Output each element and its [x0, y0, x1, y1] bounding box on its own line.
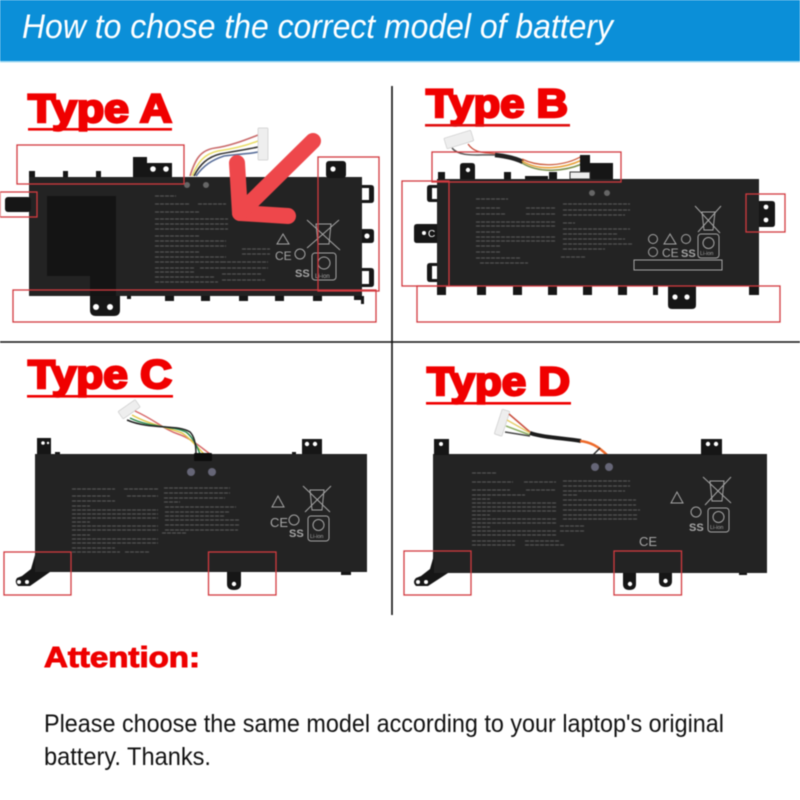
- panel: type B: [402, 82, 785, 322]
- icon: crossed bin: [695, 206, 721, 233]
- icon: li-ion box: Li-ion: [700, 251, 713, 257]
- attention note: [44, 642, 724, 771]
- barcode outline: [634, 260, 722, 270]
- icon: warning triangle: [664, 234, 676, 244]
- marks: [270, 515, 304, 540]
- panel: type A: [0, 87, 379, 322]
- heading: type A: Type A: [28, 87, 172, 131]
- panel: type D: [404, 360, 767, 595]
- icon: li-ion box: [308, 516, 329, 541]
- icon: li-ion box: Li-ion: [315, 274, 330, 280]
- marks: [275, 249, 310, 280]
- marks: CE: [639, 534, 657, 549]
- marks: SS: [689, 522, 704, 534]
- icon: crossed bin: [303, 486, 331, 512]
- icon: crossed bin: [703, 477, 731, 505]
- battery: type C: [16, 400, 367, 590]
- icon: warning triangle: [671, 492, 683, 503]
- icon: warning triangle: [277, 234, 289, 244]
- marks: SS: [681, 248, 696, 260]
- battery: type B: C: [428, 229, 435, 240]
- attention body text: Please choose the same model according to your laptop's original: [44, 710, 724, 738]
- label text: type B: [476, 199, 633, 263]
- heading: type D: Type D: [427, 360, 570, 404]
- icon: li-ion box: Li-ion: [310, 534, 323, 540]
- red outlines: type A: [0, 145, 379, 322]
- marks: SS: [289, 528, 304, 540]
- attention body text: [44, 710, 724, 771]
- red outlines: type D: [404, 551, 682, 595]
- arrow: [237, 141, 313, 216]
- header banner: [0, 0, 800, 62]
- marks: CE: [662, 246, 679, 260]
- marks: CE: [270, 515, 288, 530]
- icon: li-ion box: Li-ion: [710, 525, 723, 531]
- icon: li-ion box: [708, 508, 729, 532]
- heading: type B: Type B: [426, 82, 568, 126]
- marks: [639, 507, 704, 549]
- battery: type B: [414, 130, 775, 309]
- marks: CE: [275, 249, 292, 263]
- heading: type C: Type C: [28, 353, 172, 397]
- label text: type A: [155, 196, 270, 282]
- icon: li-ion box: [698, 234, 719, 258]
- attention body text: battery. Thanks.: [44, 743, 211, 771]
- label text: type C: [72, 488, 240, 552]
- attention heading: Attention:: [44, 642, 200, 674]
- icon: crossed bin: [307, 220, 340, 250]
- marks: SS: [295, 268, 310, 280]
- title: How to chose the correct model of battery: [22, 8, 615, 46]
- icon: li-ion box: [312, 253, 336, 280]
- battery: type A: [5, 128, 374, 316]
- label text: type D: [472, 473, 640, 545]
- red outlines: type B: [402, 152, 785, 322]
- panel: type C: [4, 353, 367, 595]
- battery: type D: [414, 409, 767, 590]
- icon: warning triangle: [272, 496, 284, 507]
- red outlines: type C: [4, 552, 276, 595]
- marks: [648, 234, 696, 260]
